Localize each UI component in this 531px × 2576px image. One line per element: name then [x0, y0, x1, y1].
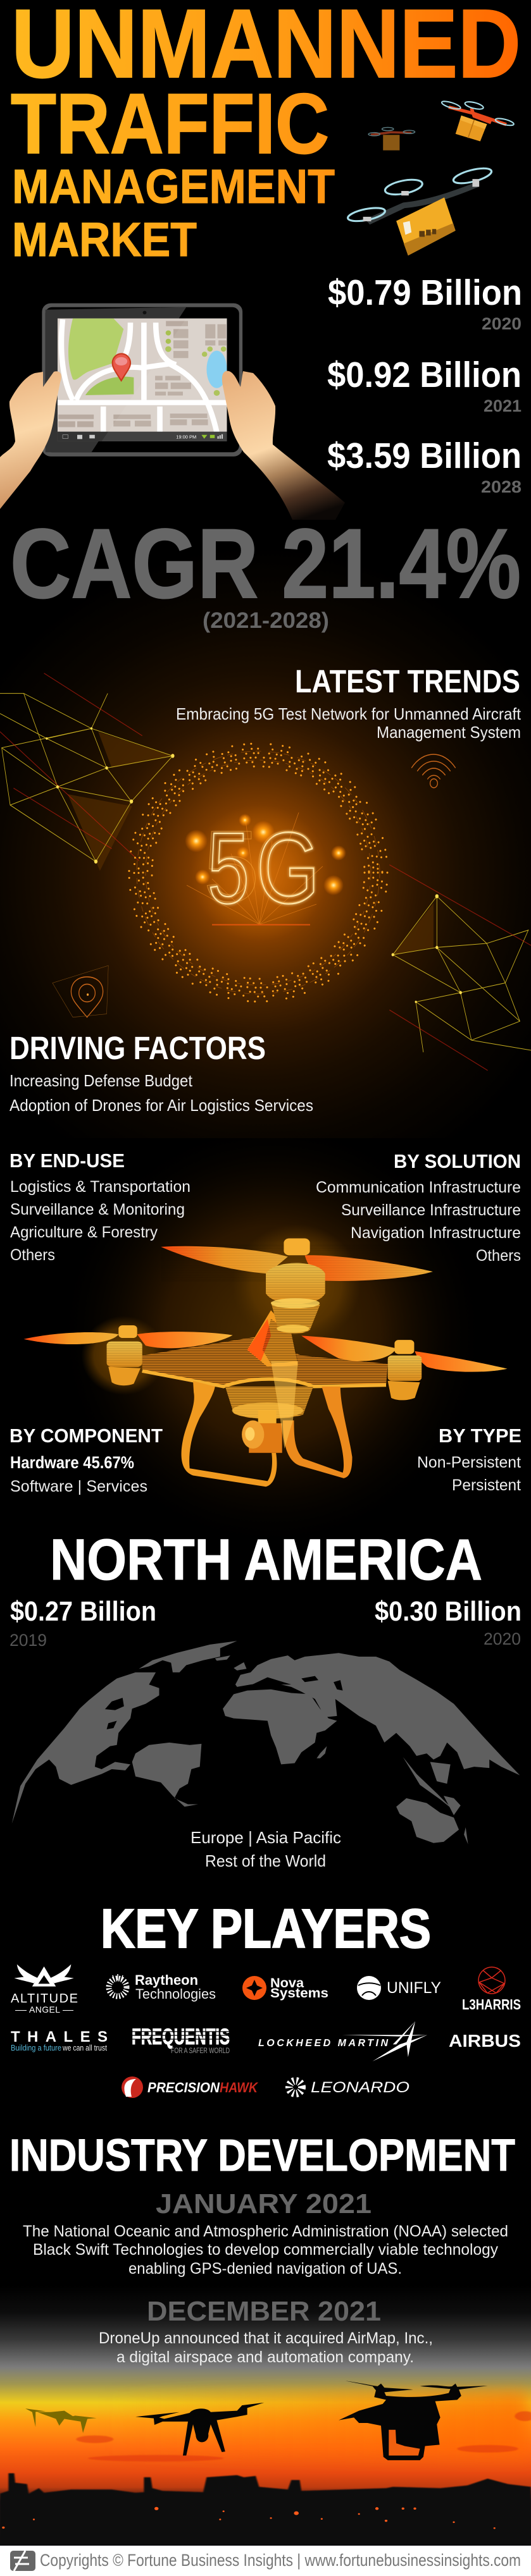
- by end-use: [9, 1150, 191, 1264]
- drone: small far: [368, 128, 415, 150]
- north america: [12, 1672, 159, 1824]
- africa: [223, 1690, 337, 1764]
- logo: unifly: UNIFLY: [387, 1979, 441, 1997]
- map pin: [113, 353, 130, 381]
- north america: 2019: [9, 1631, 47, 1650]
- motor halos: [81, 1224, 361, 1395]
- by end-use: Others: [10, 1246, 55, 1264]
- by solution: BY SOLUTION: [394, 1150, 521, 1172]
- logo: frequentis: FOR A SAFER WORLD: [171, 2046, 230, 2055]
- inland seas: [105, 1676, 343, 1729]
- by end-use: Logistics & Transportation: [10, 1178, 191, 1196]
- development: january 2021: [23, 2188, 508, 2278]
- left rotor: [23, 1325, 233, 1385]
- logo: lockheed martin: [258, 2021, 427, 2061]
- north america: Europe | Asia Pacific: [191, 1828, 341, 1847]
- by type: [417, 1425, 522, 1494]
- logo: frequentis: [130, 2025, 232, 2055]
- by solution: Surveillance Infrastructure: [341, 1201, 521, 1219]
- 5G emblem: G: [256, 811, 320, 924]
- market values: 2020: [482, 314, 522, 333]
- gimbal and legs: [182, 1381, 353, 1487]
- world map: [12, 1641, 520, 1844]
- development: december 2021: DroneUp announced that it acquired AirMap, Inc.,: [99, 2329, 433, 2347]
- top rotor: [161, 1238, 434, 1334]
- drone body: [142, 1337, 388, 1387]
- market values: 2028: [481, 477, 522, 496]
- north america: [9, 1528, 522, 1870]
- development: december 2021: [99, 2296, 433, 2366]
- network lines left and right: [0, 673, 531, 1070]
- by solution: Navigation Infrastructure: [351, 1224, 521, 1242]
- logo: leonardo: LEONARDO: [311, 2079, 409, 2096]
- title: [11, 0, 521, 267]
- footer logo: [10, 2551, 35, 2571]
- by type: BY TYPE: [439, 1425, 522, 1447]
- logo: raytheon technologies: Raytheon: [135, 1972, 198, 1988]
- 5G back outline: G: [254, 810, 321, 923]
- glass reflection: [102, 319, 227, 441]
- logo: lockheed martin: LOCKHEED MARTIN: [258, 2038, 388, 2049]
- logo: altitude angel: ALTITUDE: [11, 1992, 78, 2006]
- eurasia: [235, 1653, 520, 1776]
- icon: wifi: [411, 754, 456, 788]
- title: MANAGEMENT: [12, 160, 335, 214]
- 5G emblem: 5: [208, 811, 249, 924]
- left hand: [0, 371, 61, 509]
- 5G back outline: 5: [203, 809, 259, 923]
- logo: thales: we can all trust: [62, 2043, 107, 2052]
- development: january 2021: Black Swift Technologies to develop commercially viable technology: [33, 2241, 498, 2259]
- logo: altitude angel: [11, 1965, 78, 2015]
- by solution: [316, 1150, 521, 1265]
- south america: [132, 1743, 201, 1806]
- by component: BY COMPONENT: [9, 1425, 163, 1447]
- 5G emblem: [185, 804, 346, 941]
- logo: raytheon technologies: Technologies: [135, 1986, 216, 2002]
- orange wireframe drone: [23, 1224, 508, 1487]
- by component: Hardware 45.67%: [10, 1453, 134, 1472]
- arm: [247, 1310, 298, 1449]
- driving factors: Increasing Defense Budget: [9, 1071, 193, 1090]
- logo: nova systems: Systems: [270, 1986, 328, 2001]
- by component: Software | Services: [10, 1478, 147, 1495]
- right hand: [222, 371, 345, 520]
- key players heading: KEY PLAYERS: [101, 1898, 431, 1960]
- icon: location pin: [53, 966, 108, 1017]
- 5G fan lines: [187, 813, 323, 924]
- 5G back outline: [203, 809, 321, 923]
- by solution: Others: [476, 1247, 521, 1265]
- 5G sparks: [185, 814, 346, 895]
- logo: nova systems: Nova: [270, 1976, 304, 1990]
- map screen: 19:00 PM: [176, 434, 196, 439]
- left polygon network: [0, 673, 175, 871]
- CAGR: (2021-2028): [203, 608, 329, 633]
- north america: Rest of the World: [205, 1851, 326, 1870]
- by type: Persistent: [452, 1476, 521, 1494]
- by end-use: BY END-USE: [9, 1150, 125, 1172]
- by solution: Communication Infrastructure: [316, 1179, 521, 1196]
- icon: tablet with map: [42, 304, 242, 457]
- logo: nova systems: [242, 1976, 328, 2001]
- latest trends: [176, 663, 522, 742]
- development: january 2021: JANUARY 2021: [156, 2188, 372, 2219]
- logo: thales: THALES: [11, 2028, 108, 2045]
- logo: frequentis: FREQUENTIS: [132, 2025, 230, 2049]
- logo: precisionhawk: [122, 2076, 259, 2098]
- development: january 2021: The National Oceanic and Atmospheric Administration (NOAA) selected: [23, 2223, 508, 2240]
- by component: [9, 1425, 163, 1495]
- logo: raytheon technologies: [109, 1972, 216, 2002]
- north america: NORTH AMERICA: [50, 1528, 482, 1592]
- sky sunset: [0, 2286, 531, 2546]
- logo: precisionhawk: HAWK: [220, 2080, 259, 2095]
- market values: 2021: [484, 396, 522, 415]
- north america: 2020: [484, 1629, 521, 1648]
- silhouette drone: right: [339, 2381, 488, 2460]
- right polygon network: [389, 865, 531, 1070]
- city skyline: [0, 2473, 531, 2546]
- logo: altitude angel: ANGEL: [29, 2004, 60, 2015]
- tablet frame: [42, 304, 242, 457]
- greenland: [139, 1641, 237, 1672]
- logo: thales: Building a future: [11, 2043, 61, 2052]
- north america: $0.27 Billion: [10, 1596, 156, 1627]
- silhouette drone: center: [135, 2403, 264, 2456]
- panel: drone background glow: [0, 1119, 531, 1549]
- islands: [215, 1655, 468, 1844]
- logo: precisionhawk: PRECISION: [147, 2080, 220, 2095]
- drone: small upper right: [441, 100, 515, 141]
- development: december 2021: DECEMBER 2021: [147, 2296, 381, 2327]
- logo: l3harris: [462, 1967, 521, 2013]
- australia: [396, 1798, 459, 1843]
- driving factors: [9, 1030, 313, 1115]
- logo: unifly: [357, 1976, 441, 2000]
- by end-use: Agriculture & Forestry: [10, 1224, 158, 1241]
- icon: delivery drones: [347, 100, 515, 255]
- title: MARKET: [12, 213, 197, 267]
- driving factors: Adoption of Drones for Air Logistics Services: [9, 1096, 313, 1115]
- silhouette drone: left: [25, 2408, 97, 2433]
- development: january 2021: enabling GPS-denied navigation of UAS.: [128, 2260, 402, 2278]
- latest trends: Management System: [377, 723, 521, 742]
- cloud streaks: [76, 2411, 531, 2462]
- 5G ring of dots: [129, 744, 387, 1002]
- right rotor: [301, 1335, 508, 1400]
- title: TRAFFIC: [11, 76, 329, 171]
- development: december 2021: a digital airspace and automation company.: [116, 2348, 414, 2366]
- by end-use: Surveillance & Monitoring: [10, 1201, 185, 1218]
- by type: Non-Persistent: [417, 1454, 521, 1471]
- footer: [0, 2546, 531, 2576]
- logo: airbus: AIRBUS: [449, 2031, 521, 2051]
- map screen: [58, 319, 227, 441]
- driving factors: DRIVING FACTORS: [9, 1030, 266, 1066]
- drone: large with parcel: [347, 166, 493, 255]
- market values: [327, 273, 522, 496]
- panel: 5G trends background: [0, 506, 531, 1138]
- city lights: [2, 2507, 496, 2529]
